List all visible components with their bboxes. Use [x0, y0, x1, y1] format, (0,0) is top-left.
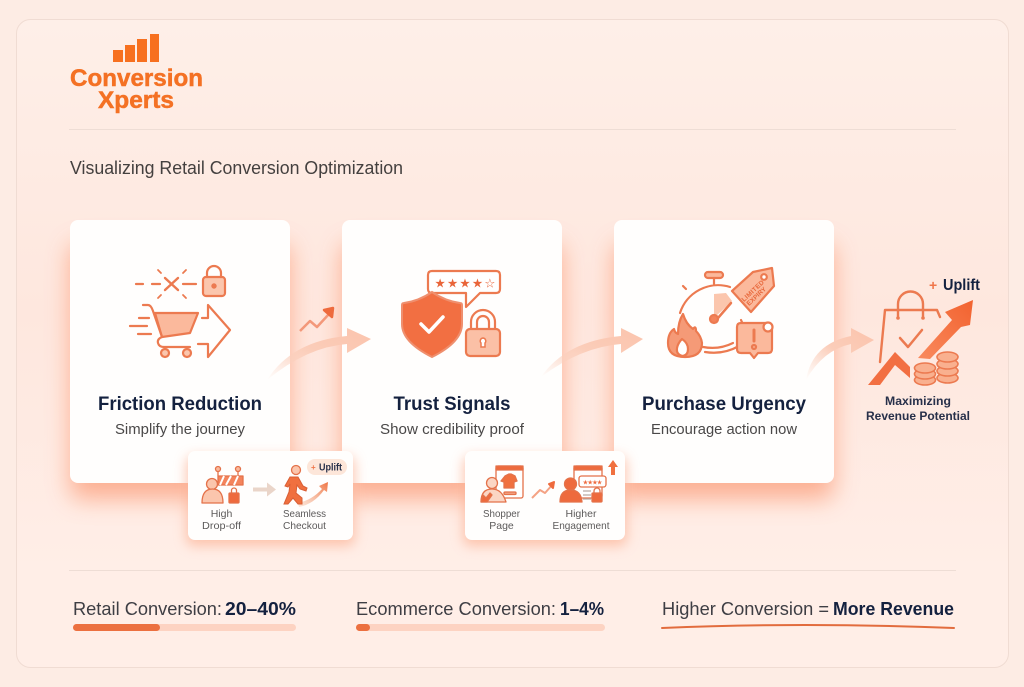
- panel: friction reduction: [70, 220, 290, 483]
- label: [483, 508, 610, 532]
- stat: retail conversion: [73, 598, 296, 631]
- panel: purchase urgency: [614, 220, 834, 483]
- outcome: maximizing revenue: [866, 277, 980, 423]
- icon: small trend arrow: [300, 308, 333, 331]
- label: Checkout: [283, 520, 326, 532]
- mini panel: shopper to engagement: [465, 451, 625, 540]
- stat: ecommerce conversion: [356, 598, 605, 631]
- label: Seamless: [283, 508, 326, 520]
- label: Engagement: [552, 520, 610, 532]
- outcome: maximizing revenue: Revenue Potential: [866, 409, 970, 423]
- label: Shopper: [483, 508, 520, 520]
- uplift pill: Uplift: [319, 462, 343, 474]
- caption: Maximizing: [885, 394, 951, 408]
- icon: blocked shopper: [202, 466, 243, 503]
- stat: retail conversion: 20–40%: [225, 598, 296, 619]
- arrow: mini grey: [253, 482, 276, 496]
- icon: up arrow: [608, 460, 618, 475]
- description: Simplify the journey: [115, 422, 246, 438]
- label: Higher: [566, 508, 597, 520]
- description: Encourage action now: [651, 422, 798, 438]
- uplift pill: +: [311, 463, 316, 472]
- icon: higher engagement: [560, 466, 606, 502]
- mini panel: drop-off to checkout: [188, 451, 353, 540]
- icon: shield, stars and lock: [402, 271, 500, 357]
- stat: retail conversion: Retail Conversion:: [73, 598, 222, 619]
- icon: stopwatch, tag, flame and alert: EXPIRY: [746, 286, 768, 307]
- arrow: friction to trust: [267, 328, 371, 380]
- subtitle heading: Visualizing Retail Conversion Optimization: [70, 158, 403, 178]
- label: [202, 508, 326, 532]
- uplift pill: [307, 459, 347, 475]
- icon: bag, uplift arrow and coins: [868, 292, 973, 385]
- icon: higher engagement: ★★★★: [582, 478, 603, 486]
- outcome: maximizing revenue: Uplift: [943, 277, 980, 294]
- icon: shield, stars and lock: ★★★★☆: [434, 276, 496, 290]
- label: High: [211, 508, 232, 520]
- arrow: trust to urgency: [541, 328, 643, 377]
- description: Show credibility proof: [380, 422, 525, 438]
- stat: ecommerce conversion: Ecommerce Conversion:: [356, 598, 556, 619]
- icon: stopwatch, tag, flame and alert: [668, 268, 774, 358]
- heading: Friction Reduction: [98, 394, 262, 415]
- card shadows: [70, 244, 834, 499]
- stat: higher conversion equals more revenue: [662, 598, 954, 628]
- icon: trend arrow: [532, 482, 554, 498]
- panel: trust signals: [342, 220, 562, 483]
- stat: higher conversion equals more revenue: Higher Conversion =: [662, 598, 829, 619]
- label: Drop-off: [202, 520, 241, 532]
- mini card shadows: [186, 456, 627, 546]
- stat: higher conversion equals more revenue: More Revenue: [833, 598, 954, 619]
- heading: Purchase Urgency: [642, 394, 806, 415]
- logo: [70, 34, 203, 114]
- icon: cart with arrow: [130, 266, 230, 357]
- stat: ecommerce conversion: 1–4%: [560, 598, 604, 619]
- uplift label: +: [929, 277, 937, 293]
- icon: shopper page: [481, 466, 523, 502]
- heading: Trust Signals: [394, 394, 510, 415]
- label: Page: [489, 520, 514, 532]
- logo: Xperts: [98, 87, 174, 114]
- icon: walking person with uplift arrow: [284, 466, 328, 507]
- arrow: urgency to outcome: [806, 328, 874, 380]
- logo: Conversion: [70, 65, 203, 92]
- icon: stopwatch, tag, flame and alert: LIMITED: [741, 279, 766, 303]
